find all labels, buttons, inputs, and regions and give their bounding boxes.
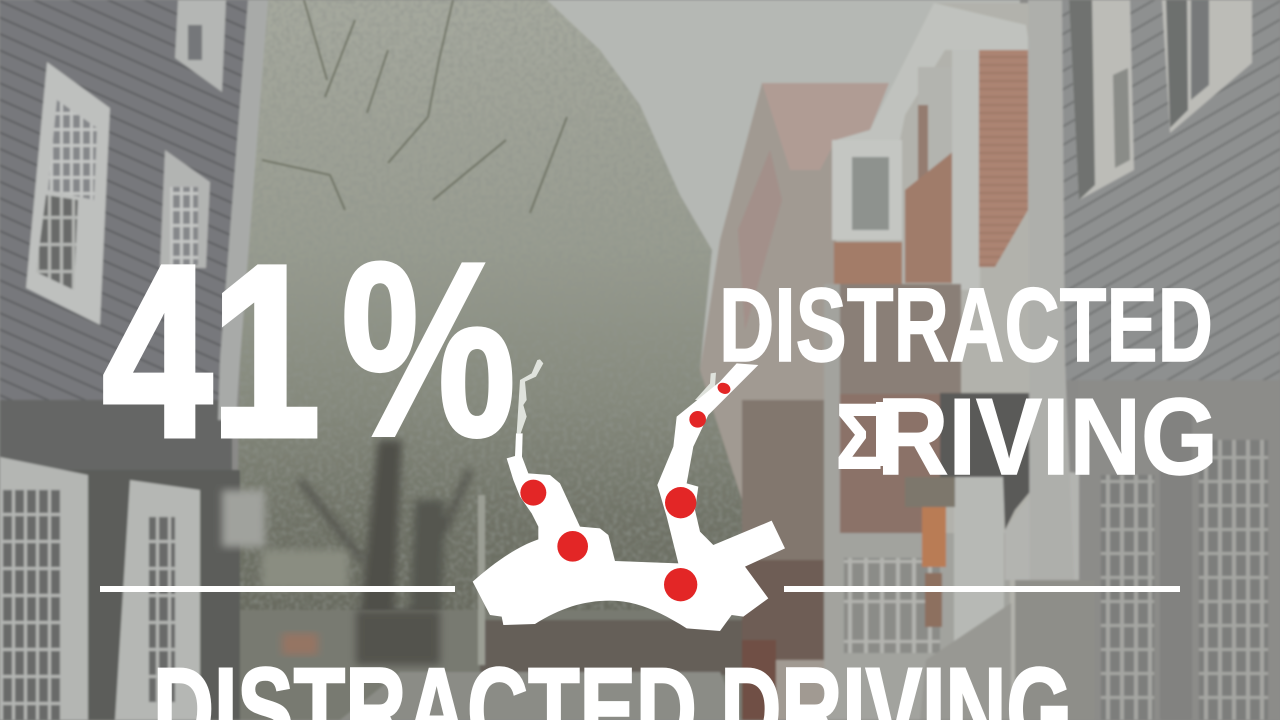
letters: riving: RIVING — [877, 376, 1218, 498]
figure: 41: 41 — [103, 216, 320, 487]
left divider line — [100, 586, 455, 592]
hotspot 5 — [689, 411, 706, 428]
hotspot 6 — [716, 381, 732, 396]
upper window — [26, 62, 110, 325]
right divider line — [784, 586, 1180, 592]
top window — [175, 0, 226, 92]
brick houses — [700, 3, 1030, 720]
glitched first letter: Σ — [836, 386, 882, 488]
street foreground — [215, 495, 835, 720]
lower white house — [840, 533, 1010, 720]
faint upper-left strand — [517, 359, 543, 433]
glitch seam — [876, 402, 884, 466]
sky — [500, 0, 1020, 420]
lower right windows — [1101, 475, 1154, 720]
bay window — [832, 140, 902, 240]
hotspot 3 — [665, 487, 696, 518]
left clapboard building — [0, 0, 268, 720]
road shape — [473, 363, 785, 631]
lower windows — [0, 457, 88, 720]
big statistic: 41% — [103, 210, 516, 488]
hotspot 1 — [520, 480, 546, 506]
tree — [238, 0, 742, 611]
downpipe column — [218, 0, 268, 420]
hotspot 2 — [557, 531, 588, 562]
percent sign: % — [341, 210, 516, 488]
white house — [836, 3, 1030, 720]
right clapboard building — [940, 0, 1280, 720]
hotspot 4 — [664, 568, 697, 601]
map of road network with red hotspots — [473, 359, 785, 631]
faint upper-right strand — [695, 373, 716, 400]
middle window — [160, 150, 210, 268]
word: driving with glitched first letter — [836, 376, 1218, 498]
heading: distracted driving, right — [719, 267, 1218, 498]
upper right windows — [1069, 0, 1134, 200]
